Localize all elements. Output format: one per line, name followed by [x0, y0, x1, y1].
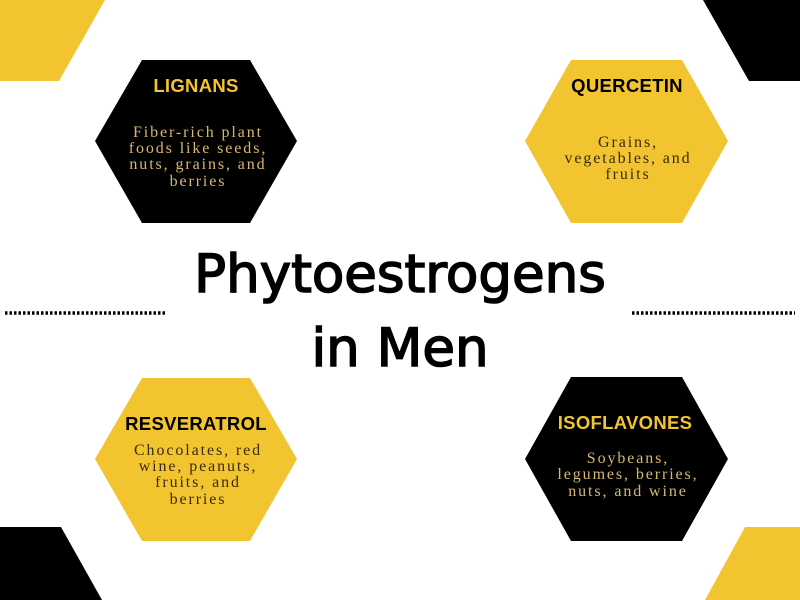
- panel: lignans: berries: [170, 173, 226, 190]
- corner shape: top-left yellow: [0, 0, 105, 81]
- panel: resveratrol: Chocolates, red: [134, 442, 262, 459]
- panel: isoflavones: ISOFLAVONES: [558, 412, 692, 433]
- panel: lignans: Fiber-rich plant: [133, 124, 263, 141]
- panel: lignans: [95, 60, 297, 223]
- panel: isoflavones: [525, 377, 728, 541]
- panel: lignans: foods like seeds,: [129, 140, 267, 157]
- title: [194, 244, 606, 379]
- panel: quercetin: QUERCETIN: [571, 75, 683, 96]
- panel: resveratrol: berries: [170, 491, 226, 508]
- panel: quercetin: fruits: [605, 166, 651, 183]
- panel: resveratrol: [95, 378, 297, 541]
- title: in Men: [311, 318, 489, 379]
- divider right dotted: [632, 311, 795, 315]
- divider left dotted: [5, 311, 165, 315]
- panel: resveratrol: wine, peanuts,: [139, 458, 257, 475]
- panel: quercetin: [525, 60, 728, 223]
- panel: isoflavones: Soybeans,: [587, 450, 669, 467]
- panel: resveratrol: RESVERATROL: [125, 413, 267, 434]
- corner shape: bottom-right yellow: [705, 527, 800, 600]
- corner shape: bottom-left black: [0, 527, 102, 600]
- panel: isoflavones: nuts, and wine: [568, 483, 688, 500]
- panel: resveratrol: fruits, and: [155, 474, 241, 491]
- panel: quercetin: vegetables, and: [564, 150, 692, 167]
- panel: lignans: nuts, grains, and: [129, 156, 267, 173]
- panel: quercetin: Grains,: [598, 134, 658, 151]
- corner shape: top-right black: [703, 0, 800, 81]
- title: Phytoestrogens: [194, 244, 606, 305]
- panel: isoflavones: legumes, berries,: [557, 466, 699, 483]
- panel: lignans: LIGNANS: [153, 75, 239, 96]
